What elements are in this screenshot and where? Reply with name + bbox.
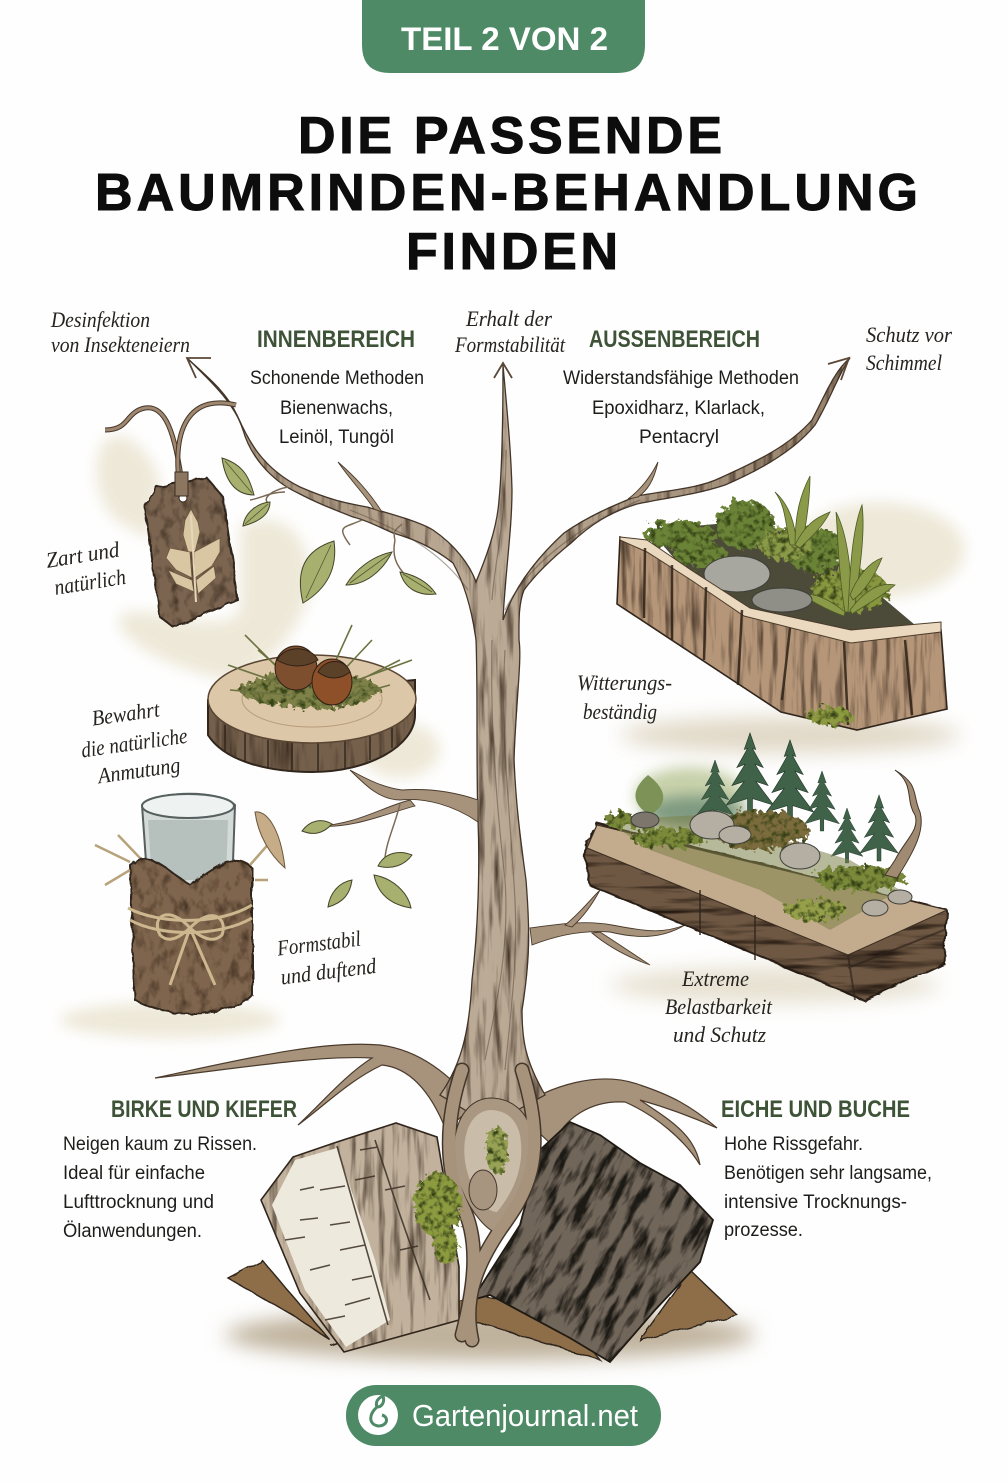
note: Formstabilität <box>454 306 566 357</box>
note: Desinfektion: Desinfektion <box>50 307 150 332</box>
text: Eiche und Buche description: intensive Trocknungs- <box>724 1192 907 1213</box>
leaves on upper branch <box>222 458 436 603</box>
note: Extreme Belastbarkeit und Schutz: Extreme <box>681 966 749 991</box>
text: Birke und Kiefer description: Ölanwendungen. <box>63 1221 202 1242</box>
tree: right root <box>515 1079 717 1165</box>
watercolour washes <box>60 436 965 1038</box>
note: Extreme Belastbarkeit und Schutz: und Schutz <box>673 1022 766 1047</box>
note: Bewahrt die natürliche Anmutung: Anmutung <box>94 752 182 789</box>
text: Aussenbereich methods: Widerstandsfähige Methoden <box>563 368 799 389</box>
note: Desinfektion: von Insekteneiern <box>51 332 190 357</box>
badge: part 2 of 2 <box>362 0 645 73</box>
footer badge: Gartenjournal.net: Gartenjournal.net <box>412 1398 638 1433</box>
note: Zart und natürlich: Zart und <box>44 536 122 573</box>
note: Schimmel: Schutz vor <box>866 322 952 347</box>
icon: sprout logo <box>358 1395 398 1435</box>
text: Birke und Kiefer description: Neigen kaum zu Rissen. <box>63 1134 257 1155</box>
text: Eiche und Buche description: Benötigen sehr langsame, <box>724 1163 932 1184</box>
note: Witterungsbeständig: Witterungs- <box>577 670 672 695</box>
note: Formstabil und duftend: Formstabil <box>275 926 362 961</box>
icon: birch bark <box>261 1123 459 1352</box>
text: Birke und Kiefer description: Lufttrocknung und <box>63 1192 214 1213</box>
icon: forest miniature on bark slab <box>584 733 947 1003</box>
heading: Eiche und Buche: EICHE UND BUCHE <box>721 1096 910 1123</box>
icon: wood slice with acorns <box>208 625 416 772</box>
note: Bewahrt die natürliche Anmutung <box>75 693 193 790</box>
note: Formstabil und duftend <box>275 924 378 990</box>
note: Desinfektion <box>50 307 190 357</box>
heading: Aussenbereich: AUSSENBEREICH <box>589 326 760 353</box>
note: Witterungsbeständig <box>577 670 672 724</box>
text: Eiche und Buche description: prozesse. <box>724 1220 803 1241</box>
text: Eiche und Buche description <box>724 1134 932 1241</box>
note: Extreme Belastbarkeit und Schutz: Belastbarkeit <box>665 994 773 1019</box>
icon: root loop with moss <box>414 1070 534 1340</box>
text: Innenbereich methods: Leinöl, Tungöl <box>279 427 394 448</box>
note: Formstabilität: Erhalt der <box>465 306 552 331</box>
text: Innenbereich methods: Bienenwachs, <box>280 398 393 419</box>
title: DIE PASSENDE <box>298 107 722 165</box>
tree: left root <box>155 1044 475 1130</box>
footer badge: Gartenjournal.net <box>346 1385 661 1446</box>
note: Witterungsbeständig: beständig <box>583 699 657 724</box>
tree: trunk and main branches <box>187 358 850 1125</box>
note: Formstabilität: Formstabilität <box>454 332 566 357</box>
text: Birke und Kiefer description <box>63 1134 257 1242</box>
ground shadow under bark <box>225 1309 755 1361</box>
text: Innenbereich methods: Schonende Methoden <box>250 368 424 389</box>
icon: oak bark <box>478 1121 714 1364</box>
note: Schimmel <box>866 322 952 375</box>
leaves on lower branch <box>302 821 412 908</box>
icon: under bark pieces <box>228 1260 737 1360</box>
note: Bewahrt die natürliche Anmutung: Bewahrt <box>90 696 162 731</box>
tree <box>155 358 850 1165</box>
tree: bark grain <box>350 450 640 1070</box>
title: BAUMRINDEN-BEHANDLUNG <box>95 164 918 222</box>
title <box>95 107 918 281</box>
title: FINDEN <box>406 223 618 281</box>
note: Zart und natürlich: natürlich <box>52 564 127 600</box>
note: Bewahrt die natürliche Anmutung: die natürliche <box>79 723 189 762</box>
text: Aussenbereich methods: Pentacryl <box>639 427 719 448</box>
text: Aussenbereich methods <box>563 368 799 448</box>
tree: twigs <box>318 462 685 965</box>
icon: glass jar wrapped in bark <box>95 794 285 1014</box>
text: Birke und Kiefer description: Ideal für einfache <box>63 1163 205 1184</box>
text: Eiche und Buche description: Hohe Rissgefahr. <box>724 1134 863 1155</box>
note: Formstabil und duftend: und duftend <box>279 953 378 989</box>
heading: Innenbereich: INNENBEREICH <box>257 326 415 353</box>
heading: Birke und Kiefer: BIRKE UND KIEFER <box>111 1096 297 1123</box>
tree: arrow heads <box>187 358 849 380</box>
note: Zart und natürlich <box>44 536 127 600</box>
note: Extreme Belastbarkeit und Schutz <box>665 966 773 1047</box>
icon: raised bed of bark with plants <box>617 476 960 753</box>
text: Innenbereich methods <box>250 368 424 448</box>
note: Schimmel: Schimmel <box>866 350 942 375</box>
icon: bark tag with leaf <box>105 403 238 627</box>
badge: part 2 of 2: TEIL 2 VON 2 <box>401 21 608 57</box>
text: Aussenbereich methods: Epoxidharz, Klarlack, <box>592 398 765 419</box>
